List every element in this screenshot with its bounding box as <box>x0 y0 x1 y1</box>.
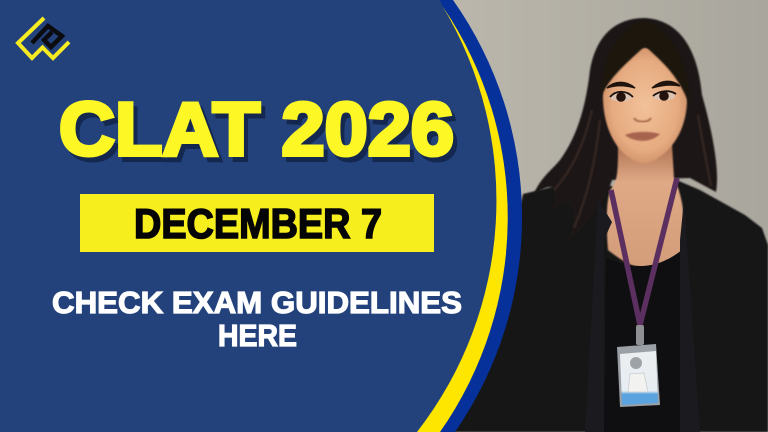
face <box>603 48 687 163</box>
photo background <box>400 0 768 432</box>
curved border: dark blue <box>0 0 522 432</box>
lanyard <box>611 178 677 325</box>
subtitle: HERE <box>218 318 297 353</box>
title: CLAT 2026: CLAT 2026 <box>59 87 454 171</box>
lips <box>625 132 660 141</box>
black top <box>604 250 682 432</box>
gown <box>440 178 768 432</box>
gown lapels <box>585 200 700 432</box>
hair back <box>533 18 717 240</box>
badge portrait <box>628 357 648 392</box>
eyes <box>610 91 676 102</box>
lanyard clip <box>636 325 644 345</box>
subtitle <box>52 285 462 353</box>
photo: student in black gown <box>400 0 768 432</box>
hair parting <box>601 20 689 104</box>
hair highlights <box>554 110 711 228</box>
curved border: yellow <box>0 7 508 432</box>
eyebrows <box>607 81 680 88</box>
id badge <box>617 344 660 407</box>
date text: DECEMBER 7 <box>134 200 382 247</box>
date banner <box>80 194 434 252</box>
blue panel <box>0 0 496 432</box>
logo <box>18 18 69 58</box>
logo: black P mark <box>32 26 62 47</box>
title: CLAT 2026: CLAT 2026 <box>63 92 458 176</box>
logo: yellow W mark <box>18 18 69 58</box>
neck and chest <box>607 145 685 268</box>
subtitle: CHECK EXAM GUIDELINES <box>52 285 462 320</box>
nose <box>634 118 651 122</box>
